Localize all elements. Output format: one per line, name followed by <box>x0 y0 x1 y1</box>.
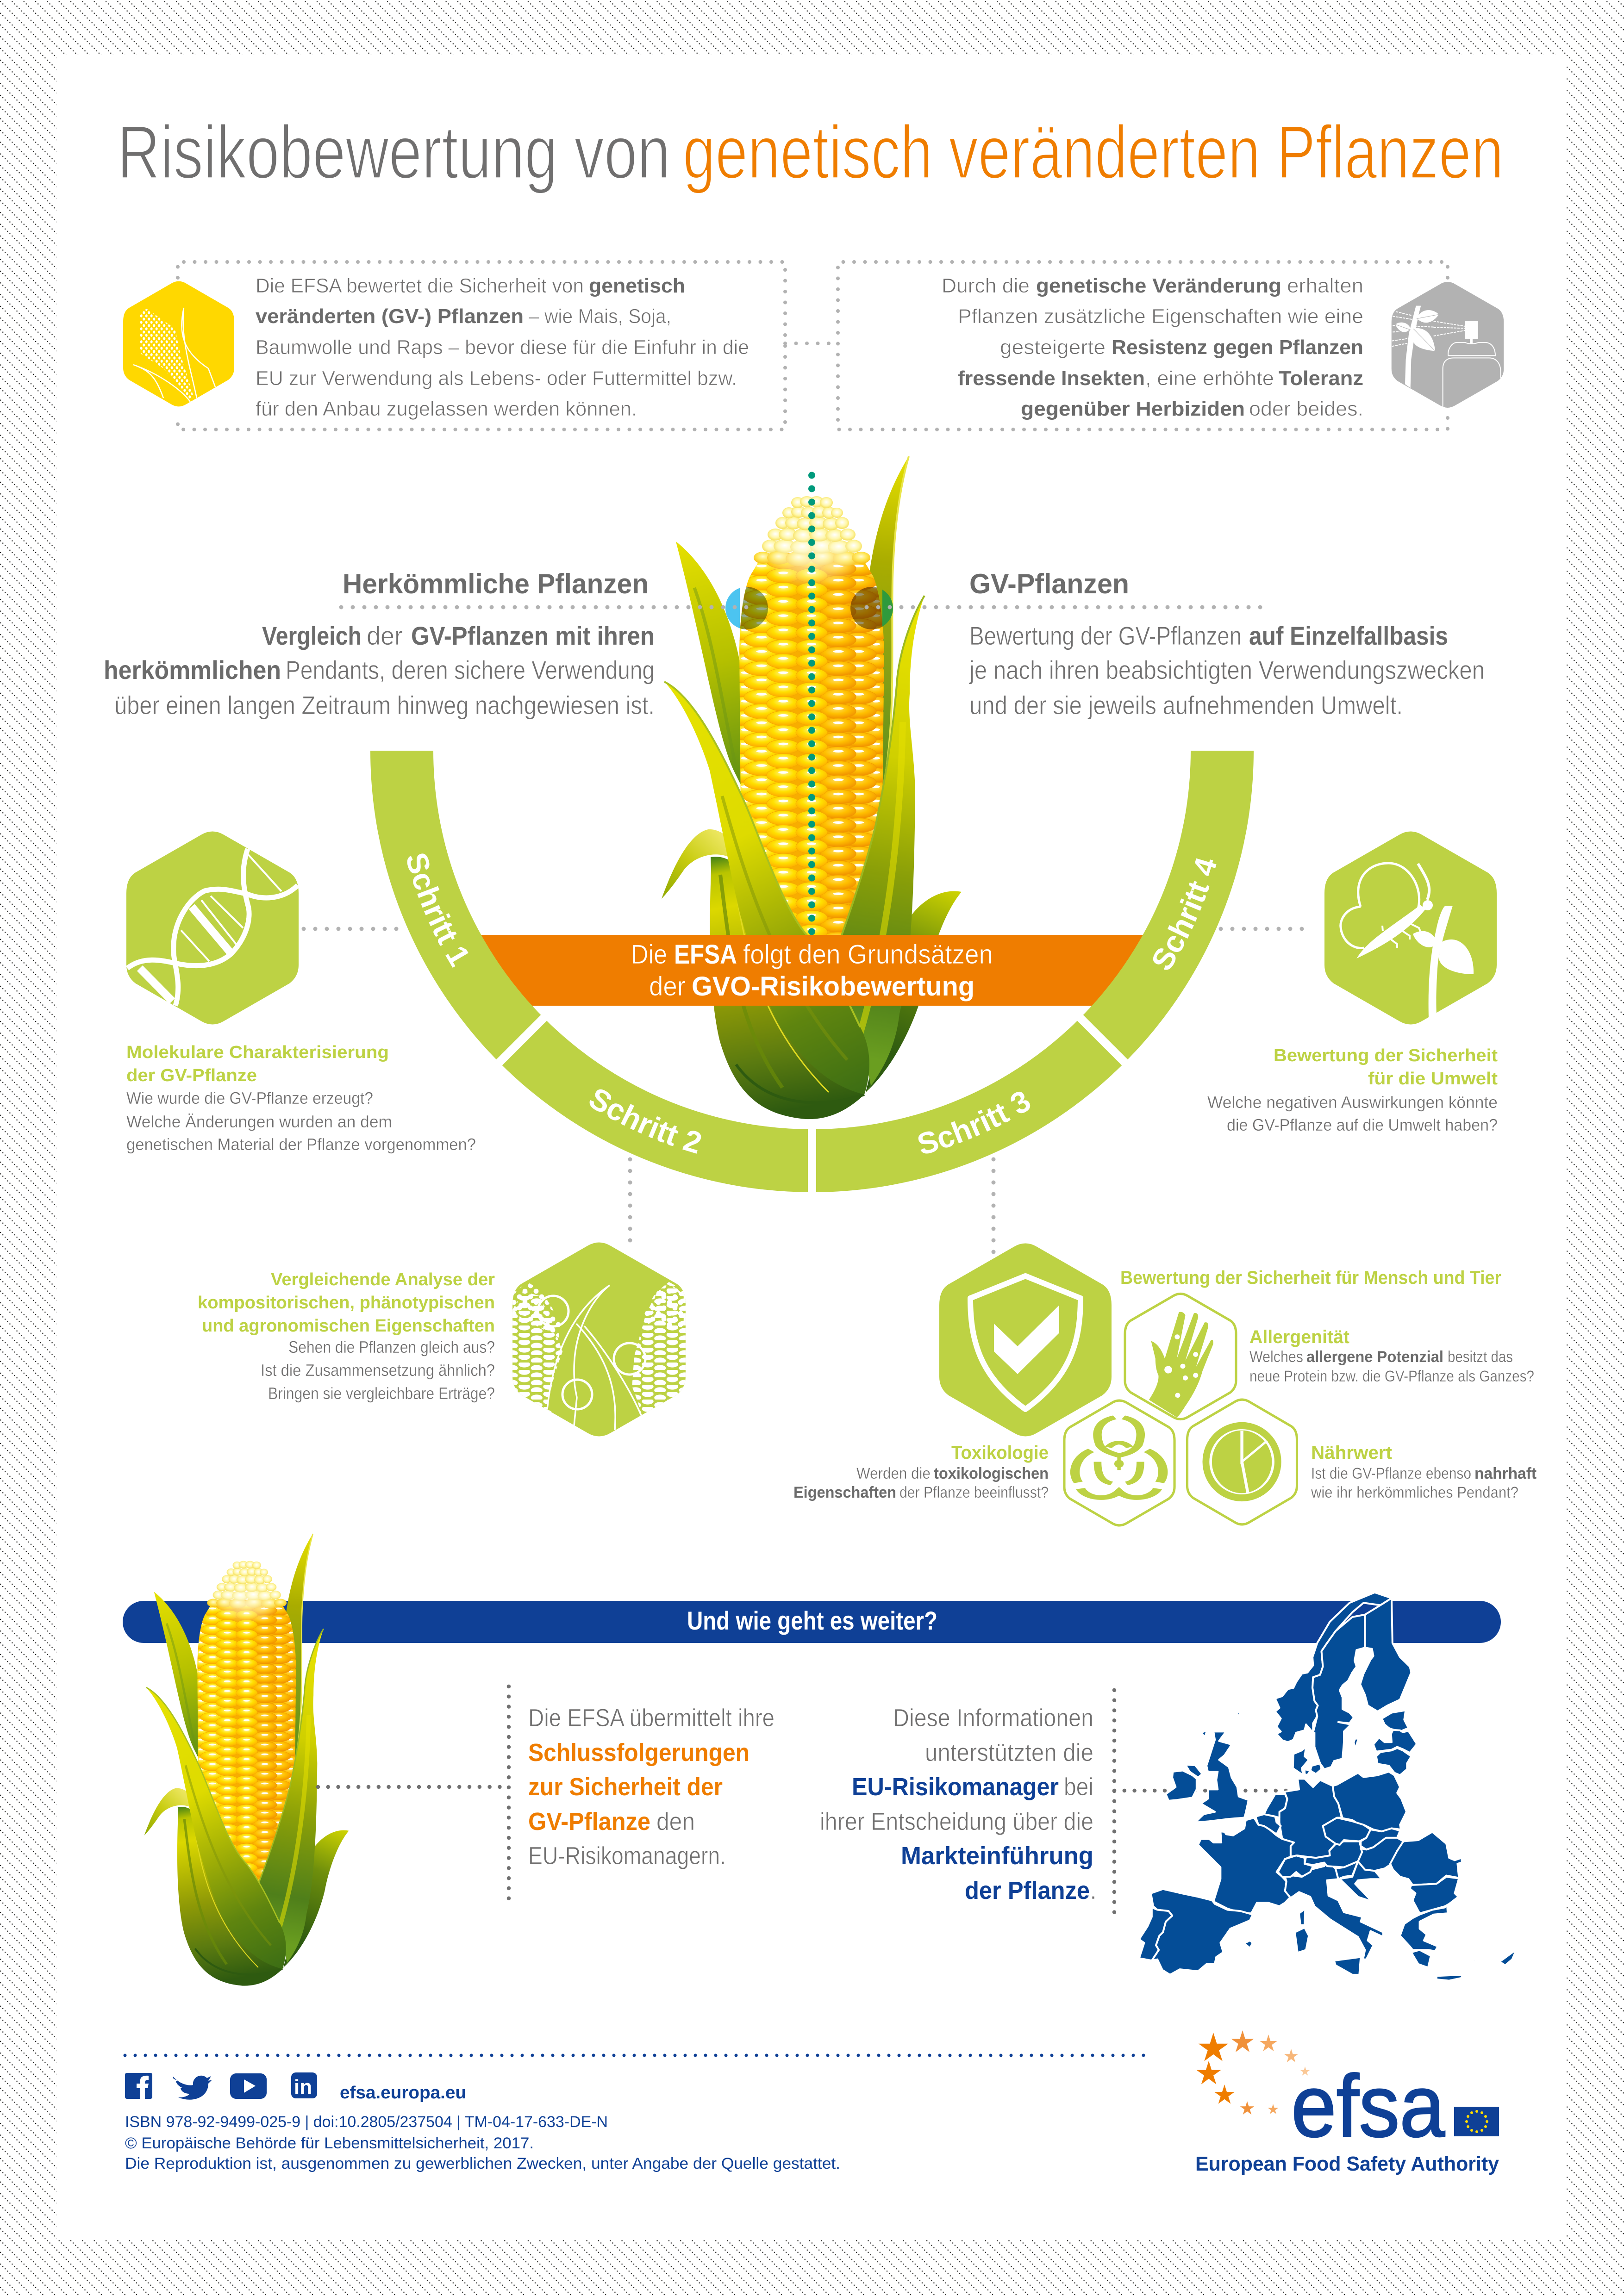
marker: blue circle <box>725 587 768 629</box>
text: footer credits <box>125 2113 840 2172</box>
text: risk managers: EU-Risikomanager <box>852 1773 1059 1801</box>
text: Toxikologie: toxikologischen <box>934 1465 1049 1482</box>
icon: linkedin: in <box>294 2076 312 2098</box>
text: GM plants: Bewertung der GV-Pflanzen <box>969 621 1242 650</box>
icon: corn hexagon <box>123 281 234 406</box>
text: Nährwert: wie ihr herkömmliches Pendant? <box>1311 1484 1518 1501</box>
text: footer credits: Die Reproduktion ist, ausgenommen zu gewerblichen Zwecken, unter Angabe der Quelle gestattet. <box>125 2155 840 2172</box>
panel: intro right <box>838 262 1504 429</box>
link: website: efsa.europa.eu <box>340 2083 466 2103</box>
text: footer credits: ISBN 978-92-9499-025-9 | doi:10.2805/237504 | TM-04-17-633-DE-N <box>125 2113 608 2131</box>
text: intro right: oder beides. <box>1249 398 1363 420</box>
text: Allergenität: Allergenität <box>1249 1327 1349 1347</box>
text: conclusions <box>528 1704 775 1870</box>
text: conventional plants: über einen langen Zeitraum hinweg nachgewiesen ist. <box>114 691 655 720</box>
text: Allergenität: Welches <box>1249 1348 1303 1366</box>
ring: four assessment steps <box>392 750 1232 1199</box>
text: step 1 <box>126 1043 476 1154</box>
text: Toxikologie: der Pflanze beeinflusst? <box>899 1484 1049 1501</box>
label: Schritt 2: Schritt 2 <box>583 1081 706 1160</box>
label: Schritt 3: Schritt 3 <box>913 1083 1037 1162</box>
text: Toxikologie: Toxikologie <box>951 1443 1049 1463</box>
marker: green circle <box>850 587 893 629</box>
text: step 2: Bringen sie vergleichbare Erträge? <box>268 1384 495 1403</box>
text: conclusions: GV-Pflanze <box>528 1808 650 1836</box>
text: step 4: für die Umwelt <box>1368 1069 1498 1089</box>
text: step 1: Molekulare Charakterisierung <box>126 1043 389 1062</box>
text: intro right: Durch die <box>942 274 1030 297</box>
icon: butterfly hexagon <box>1324 831 1497 1025</box>
text: intro right: gesteigerte <box>1000 336 1106 359</box>
text: risk managers: Markteinführung <box>901 1842 1093 1870</box>
text: intro left: für den Anbau zugelassen werden können. <box>256 398 637 420</box>
text: conventional plants: der <box>367 621 403 650</box>
text: step 2: Vergleichende Analyse der <box>271 1270 495 1289</box>
text: intro right: , eine erhöhte <box>1145 367 1274 390</box>
banner: EFSA principles: folgt den Grundsätzen <box>743 940 993 970</box>
text: intro left: Baumwolle und Raps – bevor diese für die Einfuhr in die <box>256 336 749 359</box>
text: step 2: kompositorischen, phänotypischen <box>198 1293 495 1313</box>
text: conclusions: Die EFSA übermittelt ihre <box>528 1704 775 1732</box>
text: GM plants: auf Einzelfallbasis <box>1249 621 1448 650</box>
logo: EFSA <box>1195 2030 1499 2175</box>
icon: shield hexagon <box>939 1243 1112 1437</box>
text: risk managers: bei <box>1064 1773 1093 1801</box>
text: Nährwert: Ist die GV-Pflanze ebenso <box>1311 1465 1471 1482</box>
text: intro right: genetische Veränderung <box>1036 274 1281 297</box>
text: intro left: Die EFSA bewertet die Sicherheit von <box>256 274 584 297</box>
logo: EFSA: efsa <box>1291 2057 1445 2155</box>
text: intro right: fressende Insekten <box>958 367 1145 390</box>
banner: EFSA principles <box>463 935 1162 1006</box>
step 4: environmental safety <box>1207 831 1498 1134</box>
text: risk managers: der Pflanze <box>965 1877 1090 1904</box>
heading: human and animal safety: Bewertung der Sicherheit für Mensch und Tier <box>1120 1268 1501 1288</box>
text: footer credits: © Europäische Behörde für Lebensmittelsicherheit, 2017. <box>125 2134 534 2152</box>
text: risk managers: Diese Informationen <box>893 1704 1093 1732</box>
text: step 1: genetischen Material der Pflanze vorgenommen? <box>126 1135 476 1154</box>
icon: biohazard hexagon <box>1064 1400 1174 1525</box>
icon: youtube <box>230 2073 267 2099</box>
step 1: molecular characterisation <box>126 831 476 1154</box>
map: European Union <box>1139 1593 1517 1981</box>
icon: allergy hand hexagon <box>1125 1294 1236 1419</box>
text: risk managers: unterstützten die <box>925 1739 1093 1767</box>
icon: linkedin <box>291 2072 317 2098</box>
text: Nährwert: nahrhaft <box>1474 1465 1537 1482</box>
text: step 1: der GV-Pflanze <box>126 1066 257 1085</box>
step 2: comparative analysis <box>198 1242 686 1437</box>
icon: twitter <box>173 2076 212 2100</box>
panel: intro left <box>123 262 785 429</box>
text: Nährwert <box>1311 1443 1537 1501</box>
text: step 4 <box>1207 1046 1498 1134</box>
banner: EFSA principles: EFSA <box>674 940 737 970</box>
text: risk managers <box>820 1704 1097 1904</box>
text: risk managers: ihrer Entscheidung über die <box>820 1808 1093 1836</box>
icon: sprayer hexagon <box>1392 282 1504 408</box>
text: conventional plants: Vergleich <box>262 621 362 650</box>
text: step 2: und agronomischen Eigenschaften <box>202 1316 495 1336</box>
text: Toxikologie <box>793 1443 1049 1501</box>
text: conventional plants: Pendants, deren sichere Verwendung <box>286 655 655 684</box>
text: Toxikologie: Werden die <box>856 1465 931 1482</box>
text: intro left: – wie Mais, Soja, <box>529 305 671 328</box>
text: step 2: Sehen die Pflanzen gleich aus? <box>288 1338 495 1356</box>
text: intro right: Toleranz <box>1279 367 1363 390</box>
marker: teal dotted gene line <box>808 475 815 933</box>
text: conventional plants <box>104 621 655 720</box>
label: Schritt 1: Schritt 1 <box>399 849 477 972</box>
text: GM plants: je nach ihren beabsichtigten Verwendungszwecken <box>968 655 1485 684</box>
heading: GV-Pflanzen: GV-Pflanzen <box>969 568 1129 599</box>
text: intro left <box>256 274 749 420</box>
text: conventional plants: GV-Pflanzen mit ihren <box>411 621 655 650</box>
text: Allergenität <box>1249 1327 1534 1385</box>
text: Allergenität: allergene Potenzial <box>1306 1348 1443 1366</box>
icon: DNA hexagon <box>126 831 299 1025</box>
icon: facebook <box>125 2073 152 2099</box>
logo: EFSA: European Food Safety Authority <box>1195 2153 1499 2175</box>
text: intro right: erhalten <box>1287 274 1363 297</box>
illustration: large corn cob <box>662 456 962 1119</box>
banner: EFSA principles: der <box>649 971 686 1002</box>
text: risk managers: . <box>1090 1877 1097 1904</box>
text: step 1: Welche Änderungen wurden an dem <box>126 1112 392 1131</box>
text: conclusions: den <box>656 1808 695 1836</box>
icon: corn and leaf hexagon <box>512 1242 686 1437</box>
banner: Und wie geht es weiter <box>123 1601 1501 1643</box>
text: conventional plants: herkömmlichen <box>104 655 281 684</box>
text: conclusions: zur Sicherheit der <box>528 1773 723 1801</box>
text: intro right: gegenüber Herbiziden <box>1021 398 1245 420</box>
text: Allergenität: neue Protein bzw. die GV-Pflanze als Ganzes? <box>1249 1368 1534 1385</box>
text: step 2 <box>198 1270 495 1403</box>
text: intro left: EU zur Verwendung als Lebens- oder Futtermittel bzw. <box>256 367 737 390</box>
text: Toxikologie: Eigenschaften <box>793 1484 896 1501</box>
banner: EFSA principles: GVO-Risikobewertung <box>692 971 974 1002</box>
text: intro right: Resistenz gegen Pflanzen <box>1112 336 1363 359</box>
heading: Herkömmliche Pflanzen: Herkömmliche Pflanzen <box>343 568 649 599</box>
text: step 1: Wie wurde die GV-Pflanze erzeugt? <box>126 1089 373 1108</box>
banner: EFSA principles: Die <box>631 940 667 970</box>
text: intro left: veränderten (GV-) Pflanzen <box>256 305 524 328</box>
text: step 4: Bewertung der Sicherheit <box>1274 1046 1498 1065</box>
text: conclusions: EU-Risikomanagern. <box>528 1842 726 1870</box>
text: intro right <box>942 274 1363 420</box>
illustration: small corn cob <box>144 1534 349 1986</box>
title: Risikobewertung von <box>117 110 670 194</box>
text: conclusions: Schlussfolgerungen <box>528 1739 750 1767</box>
banner: Und wie geht es weiter: Und wie geht es weiter? <box>687 1606 937 1635</box>
text: step 2: Ist die Zusammensetzung ähnlich? <box>261 1361 495 1380</box>
text: Nährwert: Nährwert <box>1311 1443 1392 1463</box>
text: intro right: Pflanzen zusätzliche Eigenschaften wie eine <box>958 305 1363 328</box>
text: intro left: genetisch <box>589 274 685 297</box>
step 3: human and animal safety <box>793 1243 1537 1525</box>
text: step 4: die GV-Pflanze auf die Umwelt haben? <box>1227 1115 1498 1134</box>
text: step 4: Welche negativen Auswirkungen könnte <box>1207 1093 1498 1112</box>
label: Schritt 4: Schritt 4 <box>1144 853 1224 977</box>
text: GM plants: und der sie jeweils aufnehmenden Umwelt. <box>969 691 1403 720</box>
text: GM plants <box>968 621 1485 720</box>
text: Allergenität: besitzt das <box>1448 1348 1513 1366</box>
title <box>117 110 1504 194</box>
icon: nutrition pie hexagon <box>1187 1400 1297 1524</box>
